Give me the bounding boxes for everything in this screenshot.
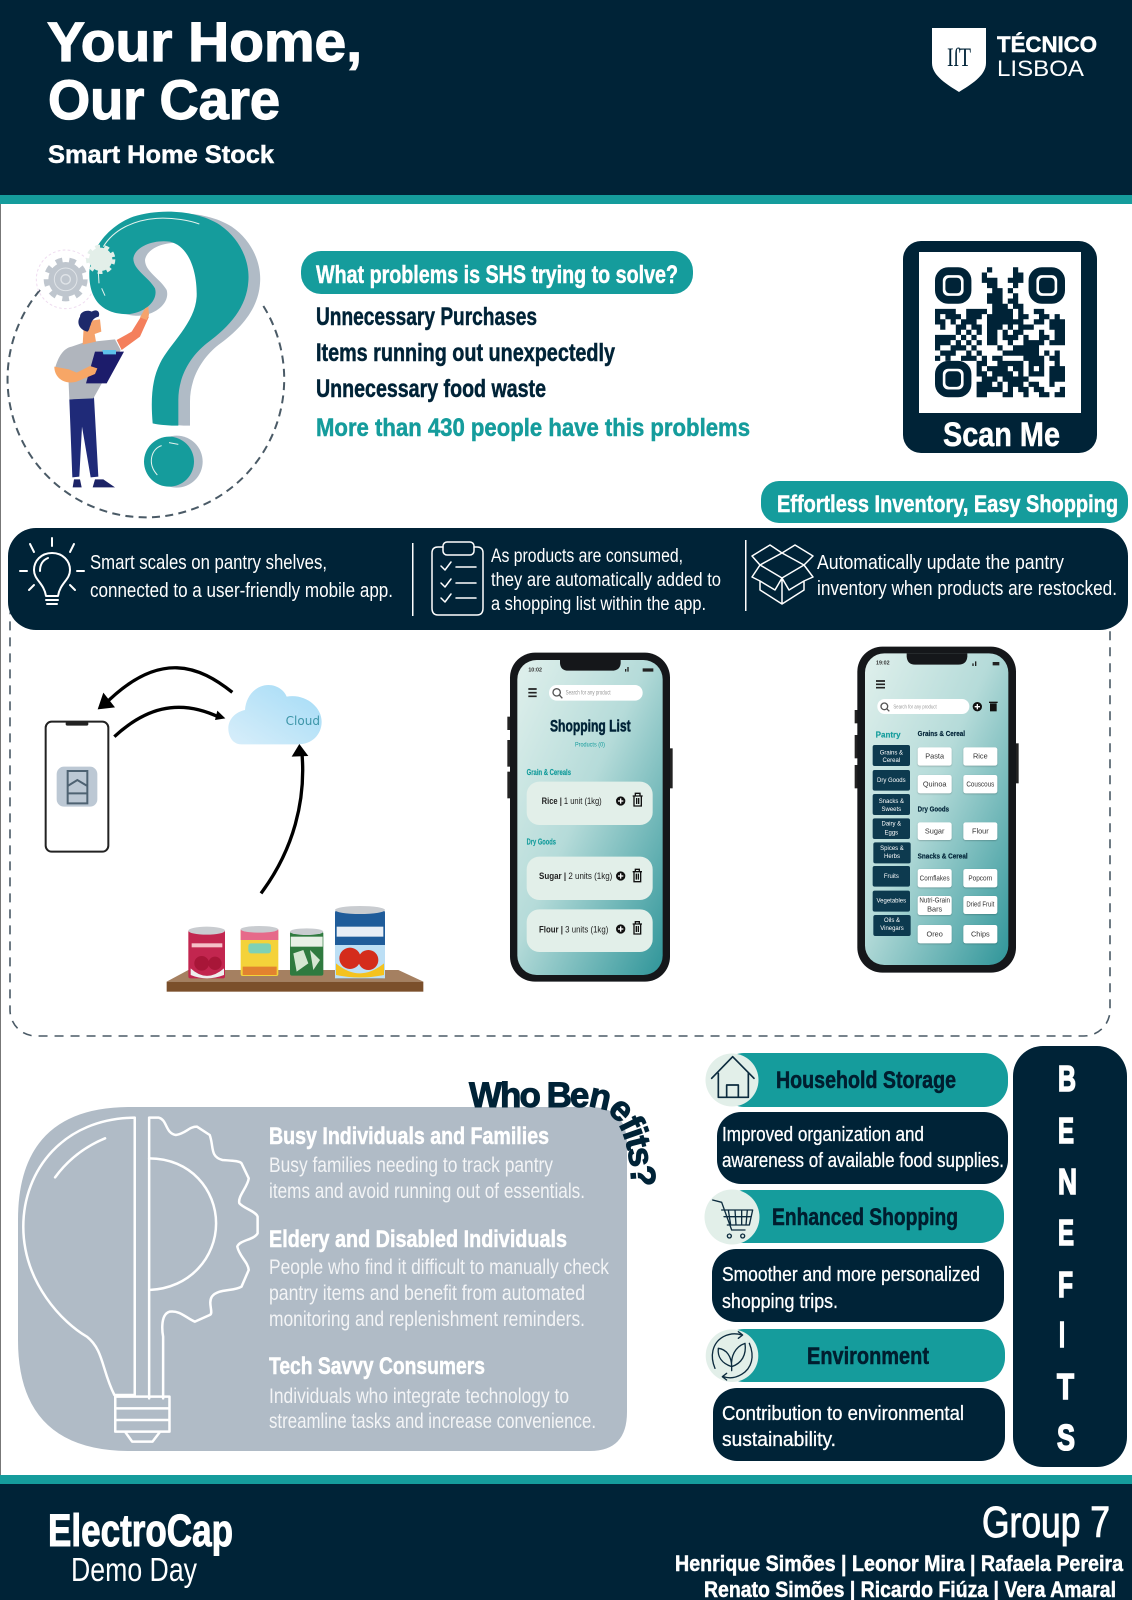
step 2 text: they are automatically added to [491, 570, 721, 591]
pantry products: Cornflakes [920, 874, 950, 883]
benefit: environment [706, 1329, 1005, 1382]
group: busy individuals [269, 1123, 585, 1203]
search bar: Search for any product [566, 691, 611, 697]
curved heading: who benefits: Who Benefits? [468, 1081, 656, 1185]
problems list: Unnecessary Purchases [316, 303, 537, 331]
footer banner [0, 1475, 1132, 1600]
pantry categories: Vinegars [880, 926, 904, 932]
problems list: Items running out unexpectedly [316, 339, 615, 367]
group: elderly and disabled: People who find it difficult to manually check [269, 1256, 609, 1279]
benefit text: sustainability [713, 1388, 1005, 1461]
step 1 text: connected to a user-friendly mobile app. [90, 580, 393, 602]
group: tech savvy [269, 1353, 596, 1433]
benefit text: shopping trips: shopping trips. [722, 1291, 838, 1313]
arrow: cloud to phone [98, 668, 232, 709]
group: elderly and disabled [269, 1226, 609, 1331]
logo: Tecnico Lisboa: IſT [947, 43, 971, 72]
team [675, 1498, 1124, 1600]
group: busy individuals: Busy families needing to track pantry [269, 1154, 553, 1177]
phone: shopping list screen: Dry Goods [527, 837, 556, 846]
step 1 text [90, 552, 393, 602]
pantry categories: Oils & [884, 918, 900, 924]
phone: pantry screen [855, 647, 1019, 973]
pantry categories: Spices & [880, 846, 904, 852]
pantry products [918, 729, 997, 943]
group: tech savvy: Tech Savvy Consumers [269, 1353, 485, 1380]
benefits column: N [1058, 1161, 1077, 1202]
search bar: Search for any product [893, 704, 937, 710]
list item: rice [527, 782, 653, 825]
title [47, 10, 362, 131]
diagram: shelf, cloud and app data flow [46, 668, 423, 992]
icon: phone with app [46, 722, 108, 852]
event name: Demo Day [71, 1551, 197, 1588]
problems list: Unnecessary food waste [316, 375, 546, 403]
pantry categories: Sweets [882, 807, 901, 813]
benefits column: I [1059, 1314, 1065, 1355]
pantry products: Popcorn [968, 874, 992, 883]
dashed frame: how it works [10, 590, 1110, 1036]
pantry categories: Fruits [884, 874, 899, 880]
group: elderly and disabled: Eldery and Disabled Individuals [269, 1226, 567, 1253]
logo: Tecnico Lisboa: LISBOA [997, 56, 1084, 81]
pantry products: Grains & Cereal [918, 729, 965, 738]
phone: shopping list screen: Grain & Cereals [527, 768, 571, 777]
benefit: household storage [706, 1053, 1008, 1107]
arrow: phone to cloud [114, 707, 225, 737]
pantry products: Chips [971, 930, 990, 939]
pantry categories: Herbs [884, 854, 900, 860]
header banner [0, 0, 1132, 204]
arrow: shelf to cloud [261, 744, 308, 893]
benefit text: shopping trips: Smoother and more personalized [722, 1264, 980, 1286]
phone: shopping list screen: 10:02 [528, 668, 542, 674]
problems list [316, 303, 750, 442]
step 2 text: a shopping list within the app. [491, 594, 706, 615]
heading: problems [301, 251, 693, 294]
event name: ElectroCap [48, 1505, 233, 1556]
benefit text: organization: awareness of available food supplies. [722, 1150, 1004, 1172]
pantry categories: Vegetables [877, 899, 906, 905]
benefit text: organization: Improved organization and [722, 1124, 924, 1146]
list item: sugar [527, 857, 653, 900]
phone: shopping list screen: Products (0) [575, 742, 605, 749]
step 3 text [817, 552, 1117, 600]
pantry products: Rice [973, 751, 988, 760]
pantry products: Bars [927, 904, 943, 913]
benefit text: organization [717, 1112, 1008, 1184]
event name [48, 1505, 233, 1588]
logo: Tecnico Lisboa: TÉCNICO [997, 32, 1097, 57]
search bar [877, 699, 998, 714]
list item: flour: Flour | 3 units (1kg) [539, 924, 608, 934]
pantry categories: Cereal [883, 758, 900, 764]
screen title: Shopping List [550, 717, 631, 736]
group: elderly and disabled: monitoring and replenishment reminders. [269, 1308, 585, 1331]
pantry categories [873, 745, 911, 936]
benefits column: B [1058, 1058, 1076, 1099]
icon: open box [752, 545, 813, 604]
group: tech savvy: Individuals who integrate technology to [269, 1385, 569, 1408]
step 2 text [491, 546, 721, 615]
icon: checklist clipboard [432, 542, 483, 615]
icon: house [712, 1057, 754, 1097]
group: tech savvy: streamline tasks and increase convenience. [269, 1410, 596, 1433]
pantry products: Oreo [927, 930, 943, 939]
pantry products: Dry Goods [918, 805, 949, 814]
benefits column [1013, 1046, 1127, 1467]
benefits column: T [1057, 1366, 1074, 1407]
benefits column: E [1058, 1110, 1074, 1151]
list item: sugar: Sugar | 2 units (1kg) [539, 871, 612, 881]
pantry categories: Grains & [880, 750, 903, 756]
search bar [549, 685, 643, 701]
subtitle: Smart Home Stock [48, 141, 274, 169]
list item: rice: Rice | 1 unit (1kg) [542, 796, 602, 806]
pantry products: Snacks & Cereal [918, 851, 968, 860]
scan me label: Scan Me [943, 416, 1060, 454]
pantry categories: Eggs [885, 831, 898, 837]
benefit: environment: Environment [807, 1343, 929, 1370]
pantry products: Flour [972, 826, 989, 835]
benefits column: F [1058, 1264, 1073, 1305]
step 2 text: As products are consumed, [491, 546, 683, 567]
pantry categories: Dry Goods [877, 778, 906, 784]
how it works band [8, 528, 1128, 630]
benefits column: E [1058, 1212, 1074, 1253]
pantry categories: Snacks & [879, 799, 904, 805]
problems list: More than 430 people have this problems [316, 414, 750, 442]
pantry products: Dried Fruit [966, 900, 994, 909]
benefit text: sustainability: Contribution to environmental [722, 1403, 964, 1425]
pantry products: Sugar [925, 826, 945, 835]
smart shelf with cans [167, 906, 423, 992]
logo: Tecnico Lisboa [932, 28, 1097, 92]
icon: light bulb [20, 538, 84, 604]
icon: shopping cart [713, 1200, 753, 1238]
phone: pantry screen: 19:02 [876, 661, 890, 667]
pantry products: Nutri-Grain [919, 896, 950, 905]
step 3 text: Automatically update the pantry [817, 552, 1064, 574]
list item: flour [527, 909, 653, 952]
icon: bulb and gear [23, 1118, 258, 1442]
pantry products: Couscous [966, 780, 995, 789]
step 1 text: Smart scales on pantry shelves, [90, 552, 327, 574]
QR code [935, 270, 1065, 395]
benefit text: sustainability: sustainability. [722, 1429, 836, 1451]
group: elderly and disabled: pantry items and benefit from automated [269, 1282, 585, 1305]
heading: problems: What problems is SHS trying to solve? [316, 261, 678, 289]
title: Our Care [48, 68, 280, 131]
benefit text: shopping trips [712, 1249, 1004, 1322]
benefit: enhanced shopping [704, 1190, 1004, 1244]
benefits column: S [1057, 1417, 1075, 1458]
illustration: person and question mark [8, 212, 284, 517]
icon: cloud: Cloud [286, 713, 320, 728]
panel: who benefits [18, 1107, 627, 1451]
icon: leaf and recycling arrows [712, 1332, 752, 1380]
phone: shopping list screen [507, 653, 673, 982]
phone: pantry screen: Pantry [876, 729, 901, 739]
tagline pill [761, 481, 1128, 523]
QR code card [903, 241, 1097, 454]
pantry products: Quinoa [923, 780, 947, 789]
benefit: enhanced shopping: Enhanced Shopping [772, 1204, 958, 1231]
group: busy individuals: Busy Individuals and Families [269, 1123, 549, 1150]
benefit: household storage: Household Storage [776, 1067, 956, 1094]
title: Your Home, [47, 10, 362, 73]
pantry categories: Dairy & [882, 822, 901, 828]
group: busy individuals: items and avoid running out of essentials. [269, 1180, 585, 1203]
pantry products: Pasta [925, 751, 945, 760]
icon: cloud [228, 685, 322, 744]
